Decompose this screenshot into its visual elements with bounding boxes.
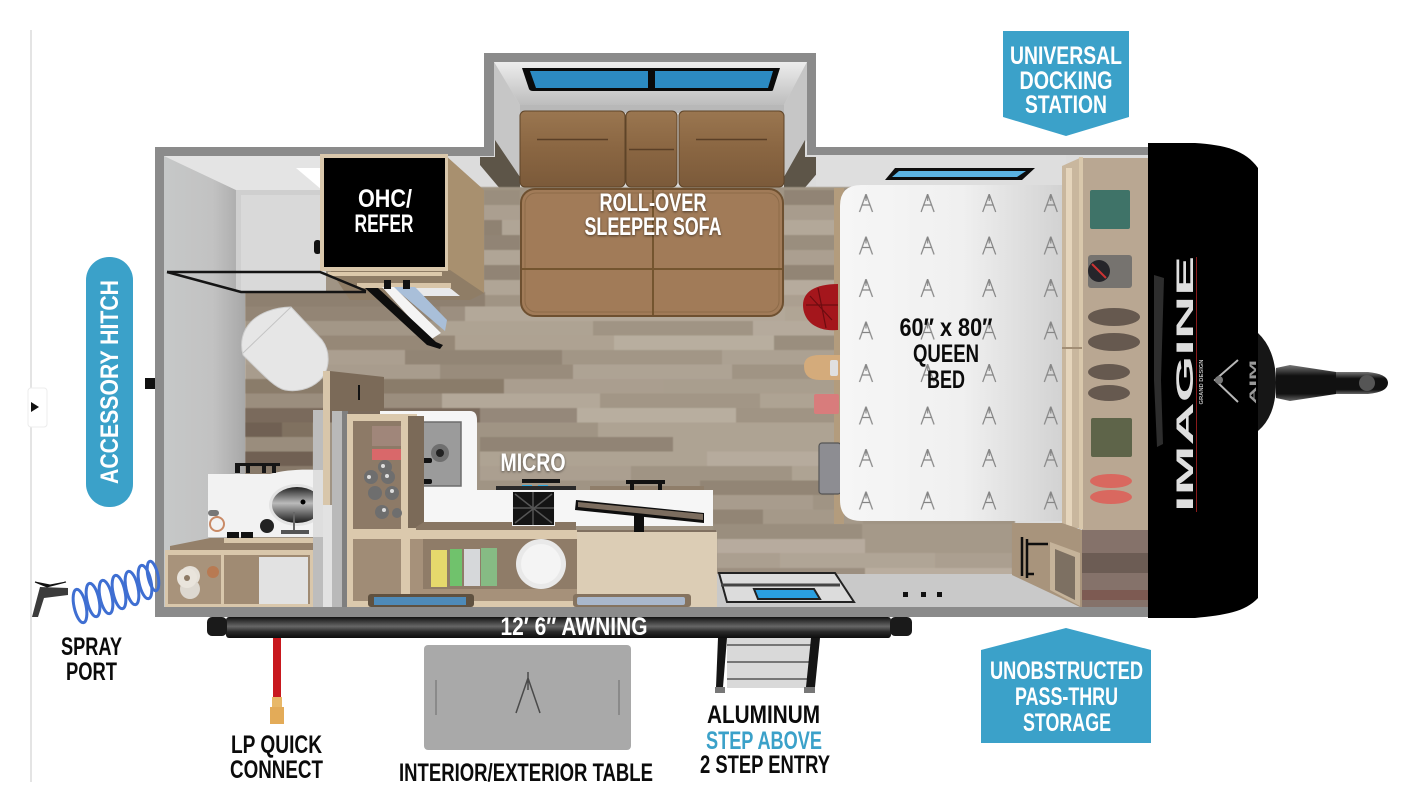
awning	[207, 613, 912, 641]
bathroom partition and door	[313, 371, 384, 607]
cabinet side: OHC	[445, 155, 484, 293]
toilet	[242, 307, 328, 391]
expand button	[28, 388, 47, 427]
trailer shell	[155, 53, 1150, 617]
label: queen bed size: BED	[927, 366, 965, 394]
label: spray port	[61, 633, 122, 686]
bathroom base cabinet	[165, 538, 313, 607]
hitch receiver stub	[145, 378, 155, 389]
Grand Design compass logo	[1199, 359, 1238, 404]
label: spray port: PORT	[66, 658, 117, 686]
gray bin	[819, 443, 841, 494]
boots	[1088, 308, 1140, 401]
front cap	[1148, 143, 1258, 618]
sofa back cushions	[520, 111, 784, 187]
red bag	[803, 284, 838, 330]
label: aluminum step above entry: ALUMINUM	[707, 701, 820, 729]
flip-up table top	[575, 500, 704, 532]
kitchen counter	[380, 411, 713, 526]
bathroom door swing with dish rack	[365, 280, 447, 349]
wood plank floor	[245, 187, 1015, 575]
spray port hose	[32, 560, 161, 624]
cooktop	[496, 479, 576, 526]
interior/exterior table	[424, 645, 631, 750]
Grand Design compass logo: GRAND DESIGN	[1199, 359, 1205, 404]
blanket	[1090, 190, 1130, 229]
bedside platform	[834, 188, 844, 524]
page edge line	[30, 30, 32, 782]
label: LP quick connect	[230, 731, 323, 784]
label: roll-over sleeper sofa	[584, 189, 722, 241]
pink box	[814, 394, 839, 414]
shower glass frame	[167, 272, 366, 292]
toilet paper rolls	[177, 566, 200, 599]
callout: universal docking station	[1003, 31, 1129, 136]
entry steps	[715, 638, 820, 693]
overhead cabinet / refrigerator	[320, 154, 448, 271]
label: queen bed size: 60″ x 80″	[900, 314, 993, 342]
callout: accessory hitch: ACCESSORY HITCH	[96, 280, 124, 484]
upper pantry and shelf unit	[347, 414, 424, 607]
callout: unobstructed pass-thru storage	[981, 628, 1151, 743]
label: awning length: 12′ 6″ AWNING	[500, 613, 648, 641]
floor mat	[719, 573, 854, 602]
label: roll-over sleeper sofa: ROLL-OVER	[600, 189, 706, 217]
shelf slats under OHC	[328, 270, 484, 300]
IMAGINE logo: IMAGINE	[1172, 256, 1199, 512]
slide-out window	[522, 68, 780, 91]
callout: universal docking station: DOCKING	[1020, 67, 1112, 95]
callout: unobstructed pass-thru storage: PASS-THRU	[1015, 683, 1118, 711]
right side upper wall band	[816, 155, 1066, 187]
walkway floor	[717, 574, 1080, 607]
bathroom left wall	[164, 156, 245, 607]
label: spray port: SPRAY	[61, 633, 122, 661]
callout: unobstructed pass-thru storage: UNOBSTRUCTED	[990, 657, 1143, 685]
callout: unobstructed pass-thru storage: STORAGE	[1023, 709, 1111, 737]
callout: universal docking station: UNIVERSAL	[1010, 42, 1122, 70]
label: MICRO: MICRO	[500, 449, 566, 477]
slide-out trim drawers	[368, 594, 474, 607]
shirt	[1088, 255, 1132, 288]
label: OHC/REFER: OHC/	[358, 185, 412, 213]
bathroom upper wall and door	[164, 156, 326, 292]
slide-out alcove walls	[480, 62, 820, 197]
sofa	[520, 111, 784, 316]
label: aluminum step above entry: STEP ABOVE	[706, 727, 822, 755]
flip flops	[1090, 474, 1132, 504]
label: table: INTERIOR/EXTERIOR TABLE	[399, 759, 653, 787]
label: aluminum step above entry	[700, 701, 830, 779]
label: LP quick connect: LP QUICK	[231, 731, 322, 759]
floor vents	[903, 592, 942, 597]
bathroom vanity top with sink	[208, 463, 325, 544]
label: queen bed size	[900, 314, 993, 394]
interior base	[164, 62, 1148, 607]
label: OHC/REFER: REFER	[354, 210, 414, 238]
AIM mark: AIM	[1248, 360, 1258, 404]
label: queen bed size: QUEEN	[913, 340, 979, 368]
callout: accessory hitch	[86, 257, 133, 507]
lower front storage	[1082, 530, 1148, 607]
callout: universal docking station: STATION	[1025, 91, 1107, 119]
LP quick connect hose	[270, 638, 284, 724]
sofa seat	[521, 189, 783, 316]
skateboard and sandals	[804, 355, 840, 380]
label: roll-over sleeper sofa: SLEEPER SOFA	[584, 213, 722, 241]
pants	[1091, 418, 1132, 457]
label: OHC/REFER	[354, 185, 414, 238]
corner cabinet	[1012, 523, 1082, 607]
label: aluminum step above entry: 2 STEP ENTRY	[700, 751, 830, 779]
label: LP quick connect: CONNECT	[230, 756, 323, 784]
stove counter cabinets	[590, 480, 704, 490]
kitchen sink	[418, 422, 461, 486]
front pass-through shelf	[1062, 157, 1148, 530]
lounge table base	[573, 530, 717, 607]
bed window	[885, 168, 1035, 180]
lower kitchen shelves	[347, 522, 577, 607]
queen bed	[840, 185, 1062, 521]
tongue and coupler	[1258, 333, 1388, 431]
